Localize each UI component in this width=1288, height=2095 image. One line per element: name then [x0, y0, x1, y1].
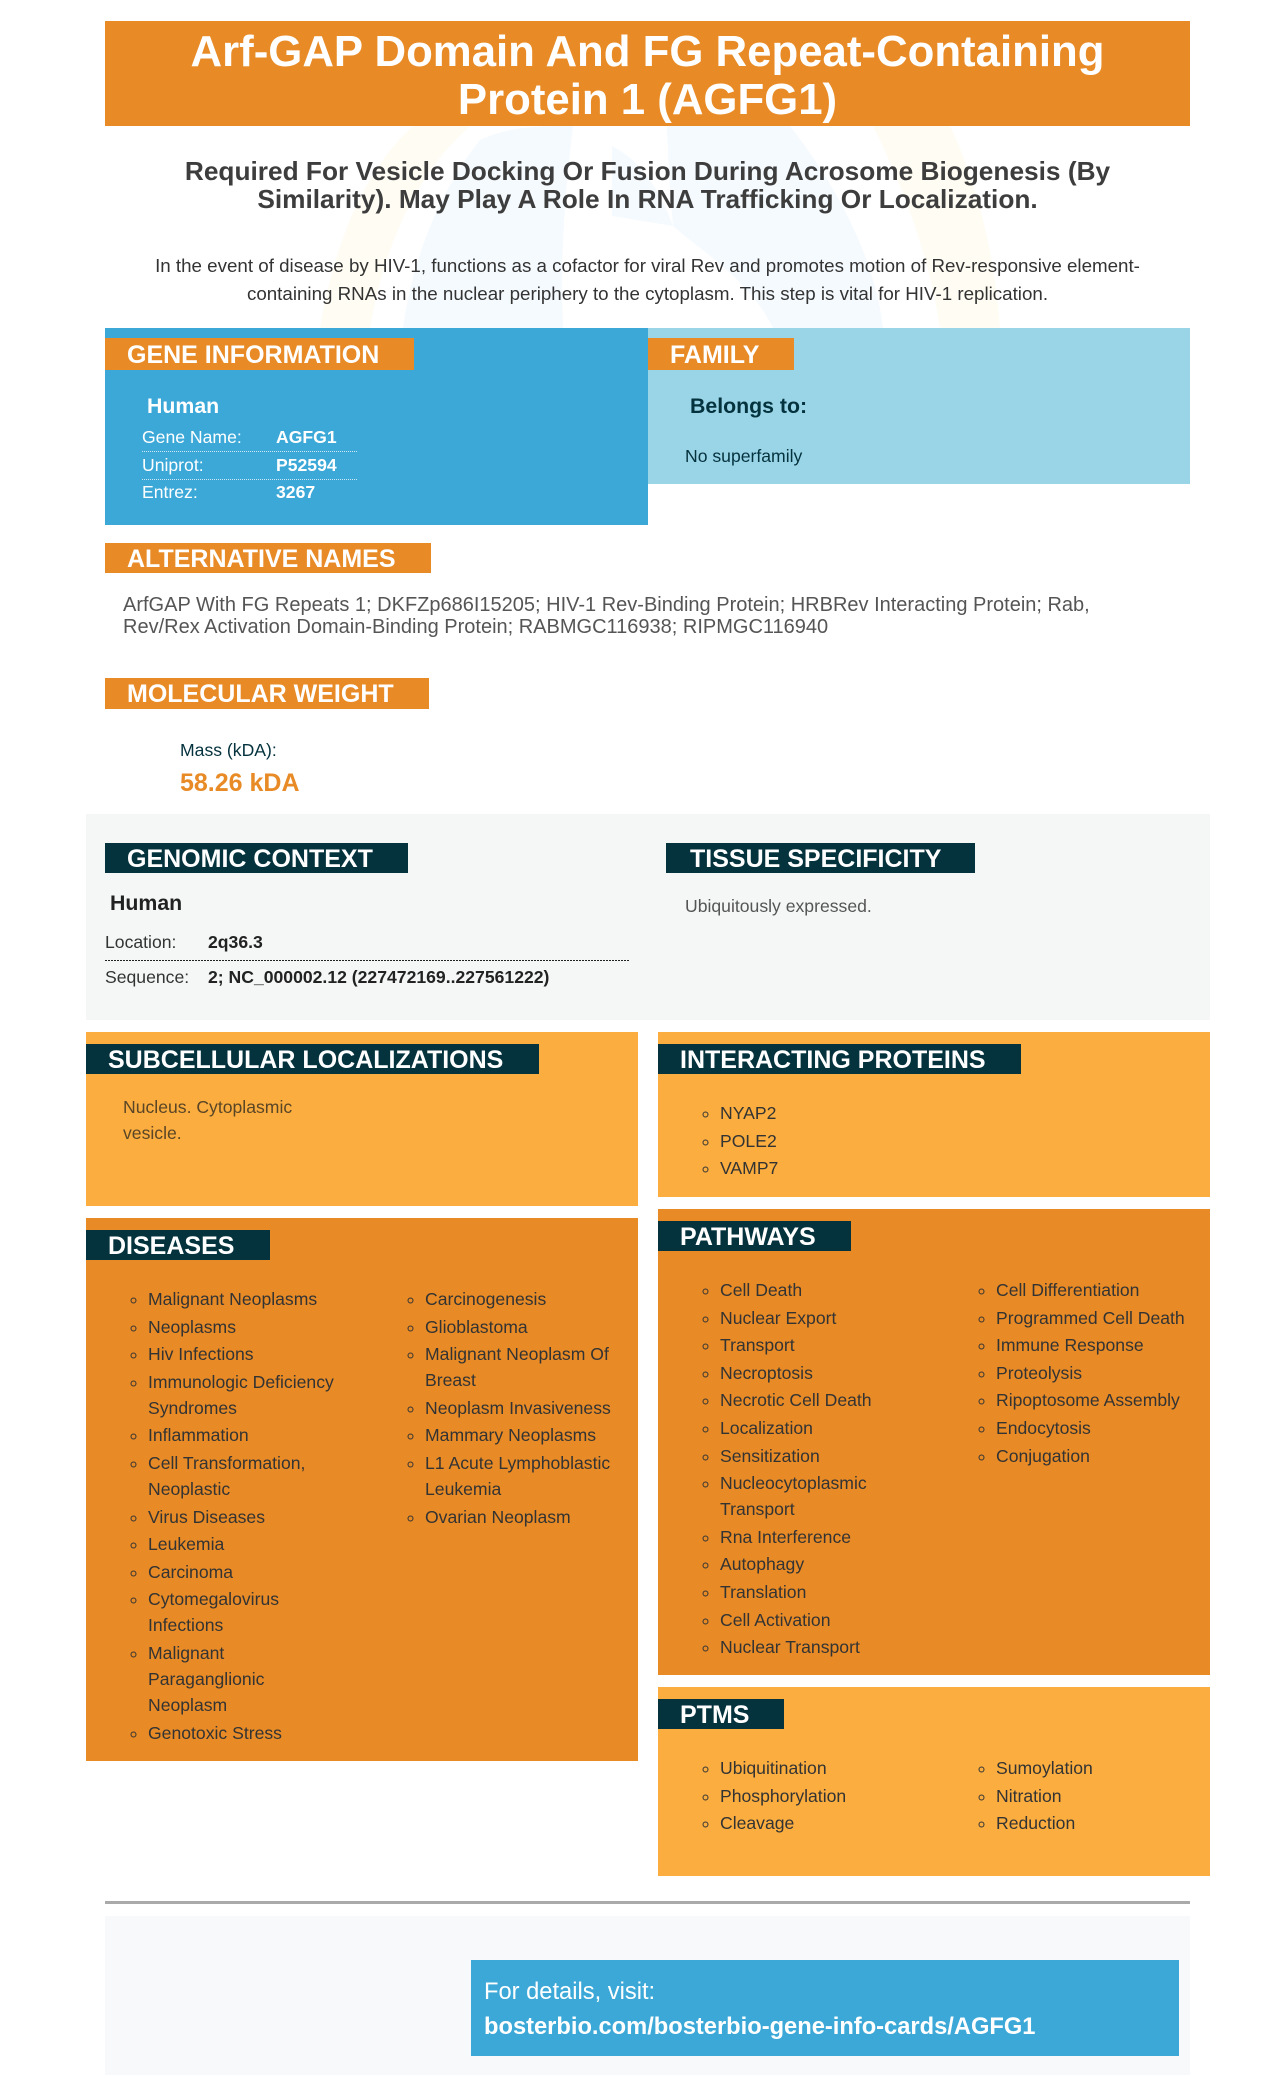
- panel: interacting proteins: [658, 1032, 1210, 1197]
- heading: family: FAMILY: [670, 341, 759, 369]
- heading: alternative names: ALTERNATIVE NAMES: [127, 545, 396, 573]
- heading: gene information: GENE INFORMATION: [127, 341, 379, 369]
- ptm list column 1: Ubiquitination: [720, 1758, 827, 1778]
- background watermark logo: [320, 126, 1000, 328]
- pathway list column 2: Immune Response: [996, 1335, 1144, 1355]
- disease list column 1: Immunologic Deficiency: [148, 1372, 334, 1392]
- pathway list column 1: Sensitization: [720, 1446, 820, 1466]
- pathway list column 2: Programmed Cell Death: [996, 1308, 1185, 1328]
- protein list: VAMP7: [720, 1158, 778, 1178]
- row: uniprot: P52594: [276, 455, 337, 475]
- heading: diseases: DISEASES: [108, 1232, 234, 1260]
- protein list: POLE2: [720, 1131, 777, 1151]
- pathway list column 2: Ripoptosome Assembly: [996, 1390, 1180, 1410]
- disease list column 1: Neoplastic: [148, 1479, 230, 1499]
- panel: diseases: [86, 1218, 638, 1761]
- species label: Human: [110, 891, 182, 915]
- heading: genomic context: GENOMIC CONTEXT: [127, 845, 373, 873]
- pathway list column 2: Endocytosis: [996, 1418, 1091, 1438]
- row: location: 2q36.3: [208, 932, 263, 952]
- disease list column 2: Glioblastoma: [425, 1317, 528, 1337]
- heading: tissue specificity: TISSUE SPECIFICITY: [690, 845, 941, 873]
- pathway list column 1: Cell Death: [720, 1280, 802, 1300]
- protein list: [702, 1103, 778, 1178]
- description: containing RNAs in the nuclear periphery to the cytoplasm. This step is vital for HIV-1 replication.: [247, 283, 1048, 304]
- ptm list column 2: Nitration: [996, 1786, 1062, 1806]
- pathway list column 1: Necroptosis: [720, 1363, 813, 1383]
- row: sequence: 2; NC_000002.12 (227472169..227561222): [208, 967, 549, 987]
- disease list column 1: Infections: [148, 1615, 223, 1635]
- ptm list column 1: [702, 1758, 846, 1833]
- row: uniprot: [142, 452, 357, 480]
- disease list column 2: Ovarian Neoplasm: [425, 1507, 571, 1527]
- alternative names text: ArfGAP With FG Repeats 1; DKFZp686I15205; HIV-1 Rev-Binding Protein; HRBRev Interacting Protein; Rab,: [123, 594, 1090, 616]
- ptm list column 1: Cleavage: [720, 1813, 794, 1833]
- alternative names text: [123, 594, 1090, 638]
- row: entrez: Entrez:: [142, 482, 198, 502]
- disease list column 2: Malignant Neoplasm Of: [425, 1344, 609, 1364]
- callout url: bosterbio.com/bosterbio-gene-info-cards/AGFG1: [484, 2014, 1035, 2040]
- tissue text: Ubiquitously expressed.: [685, 896, 872, 916]
- disease list column 1: Hiv Infections: [148, 1344, 254, 1364]
- panel: subcellular localizations: [86, 1032, 638, 1206]
- disease list column 1: Malignant: [148, 1643, 224, 1663]
- heading: subcellular localizations: SUBCELLULAR LOCALIZATIONS: [108, 1046, 503, 1074]
- disease list column 1: Carcinoma: [148, 1562, 233, 1582]
- disease list column 1: [130, 1289, 334, 1743]
- alternative names text: Rev/Rex Activation Domain-Binding Protein; RABMGC116938; RIPMGC116940: [123, 616, 828, 638]
- species label: Human: [147, 394, 219, 418]
- disease list column 2: Breast: [425, 1370, 476, 1390]
- callout: details link: [471, 1960, 1179, 2056]
- panel: footer: [105, 1916, 1190, 2075]
- localization text: Nucleus. Cytoplasmic: [123, 1097, 292, 1117]
- row: gene name: AGFG1: [276, 427, 337, 447]
- row: entrez: 3267: [276, 482, 315, 502]
- heading: ptms: PTMS: [680, 1701, 749, 1729]
- row: gene name: [142, 424, 357, 452]
- title: Protein 1 (AGFG1): [458, 75, 837, 124]
- pathway list column 2: Cell Differentiation: [996, 1280, 1139, 1300]
- disease list column 1: Cell Transformation,: [148, 1453, 305, 1473]
- callout label: For details, visit:: [484, 1979, 655, 2005]
- belongs to label: Belongs to:: [690, 394, 807, 418]
- row: location: [105, 932, 263, 952]
- heading: pathways: PATHWAYS: [680, 1223, 816, 1251]
- pathway list column 1: Localization: [720, 1418, 813, 1438]
- pathway list column 1: Nuclear Export: [720, 1308, 836, 1328]
- heading: pathways: [658, 1221, 851, 1251]
- pathway list column 1: Cell Activation: [720, 1610, 831, 1630]
- disease list column 1: Neoplasm: [148, 1695, 227, 1715]
- disease list column 1: Malignant Neoplasms: [148, 1289, 317, 1309]
- disease list column 1: Genotoxic Stress: [148, 1723, 282, 1743]
- row: location: Location:: [105, 932, 176, 952]
- disease list column 1: Syndromes: [148, 1398, 237, 1418]
- pathway list column 2: [978, 1280, 1185, 1466]
- title: Arf-GAP Domain And FG Repeat-Containing: [191, 27, 1104, 76]
- heading: molecular weight: MOLECULAR WEIGHT: [127, 680, 394, 708]
- pathway list column 1: Nucleocytoplasmic: [720, 1473, 867, 1493]
- disease list column 2: L1 Acute Lymphoblastic: [425, 1453, 610, 1473]
- heading: ptms: [658, 1699, 784, 1729]
- disease list column 1: Inflammation: [148, 1425, 249, 1445]
- ptm list column 1: Phosphorylation: [720, 1786, 846, 1806]
- pathway list column 1: Nuclear Transport: [720, 1637, 860, 1657]
- pathway list column 1: Transport: [720, 1499, 795, 1519]
- pathway list column 1: Autophagy: [720, 1554, 804, 1574]
- disease list column 1: Paraganglionic: [148, 1669, 264, 1689]
- row: gene name: Gene Name:: [142, 427, 242, 447]
- heading: diseases: [86, 1230, 270, 1260]
- disease list column 1: Leukemia: [148, 1534, 224, 1554]
- pathway list column 1: [702, 1280, 872, 1657]
- subtitle: [185, 156, 1110, 214]
- ptm list column 2: [978, 1758, 1093, 1833]
- disease list column 1: Cytomegalovirus: [148, 1589, 279, 1609]
- heading: interacting proteins: INTERACTING PROTEINS: [680, 1046, 986, 1074]
- disease list column 2: [408, 1289, 611, 1527]
- ptm list column 2: Sumoylation: [996, 1758, 1093, 1778]
- pathway list column 1: Necrotic Cell Death: [720, 1390, 872, 1410]
- subtitle: Similarity). May Play A Role In RNA Trafficking Or Localization.: [257, 184, 1038, 214]
- disease list column 2: Carcinogenesis: [425, 1289, 546, 1309]
- disease list column 2: Mammary Neoplasms: [425, 1425, 596, 1445]
- panel: genomic context and tissue specificity: [86, 814, 1210, 1020]
- protein list: NYAP2: [720, 1103, 776, 1123]
- pathway list column 2: Proteolysis: [996, 1363, 1082, 1383]
- title: [105, 21, 1190, 126]
- description: [155, 255, 1140, 304]
- family value: No superfamily: [685, 446, 802, 466]
- heading: family: [648, 338, 794, 370]
- disease list column 2: Neoplasm Invasiveness: [425, 1398, 611, 1418]
- panel: family: [648, 328, 1190, 484]
- mass value: 58.26 kDA: [180, 769, 300, 797]
- ptm list column 2: Reduction: [996, 1813, 1075, 1833]
- localization text: vesicle.: [123, 1123, 182, 1143]
- panel: ptms: [658, 1687, 1210, 1876]
- panel: pathways: [658, 1209, 1210, 1675]
- pathway list column 1: Translation: [720, 1582, 806, 1602]
- row: uniprot: Uniprot:: [142, 455, 204, 475]
- row: sequence: Sequence:: [105, 967, 189, 987]
- subtitle: Required For Vesicle Docking Or Fusion During Acrosome Biogenesis (By: [185, 156, 1110, 186]
- description: In the event of disease by HIV-1, functions as a cofactor for viral Rev and promotes motion of Rev-responsive element-: [155, 255, 1140, 276]
- pathway list column 1: Rna Interference: [720, 1527, 851, 1547]
- disease list column 1: Neoplasms: [148, 1317, 236, 1337]
- localization text: [123, 1097, 292, 1143]
- disease list column 1: Virus Diseases: [148, 1507, 265, 1527]
- disease list column 2: Leukemia: [425, 1479, 501, 1499]
- mass label: Mass (kDA):: [180, 740, 277, 760]
- row: entrez: [142, 482, 315, 502]
- pathway list column 1: Transport: [720, 1335, 795, 1355]
- pathway list column 2: Conjugation: [996, 1446, 1090, 1466]
- panel: gene information: [105, 328, 648, 525]
